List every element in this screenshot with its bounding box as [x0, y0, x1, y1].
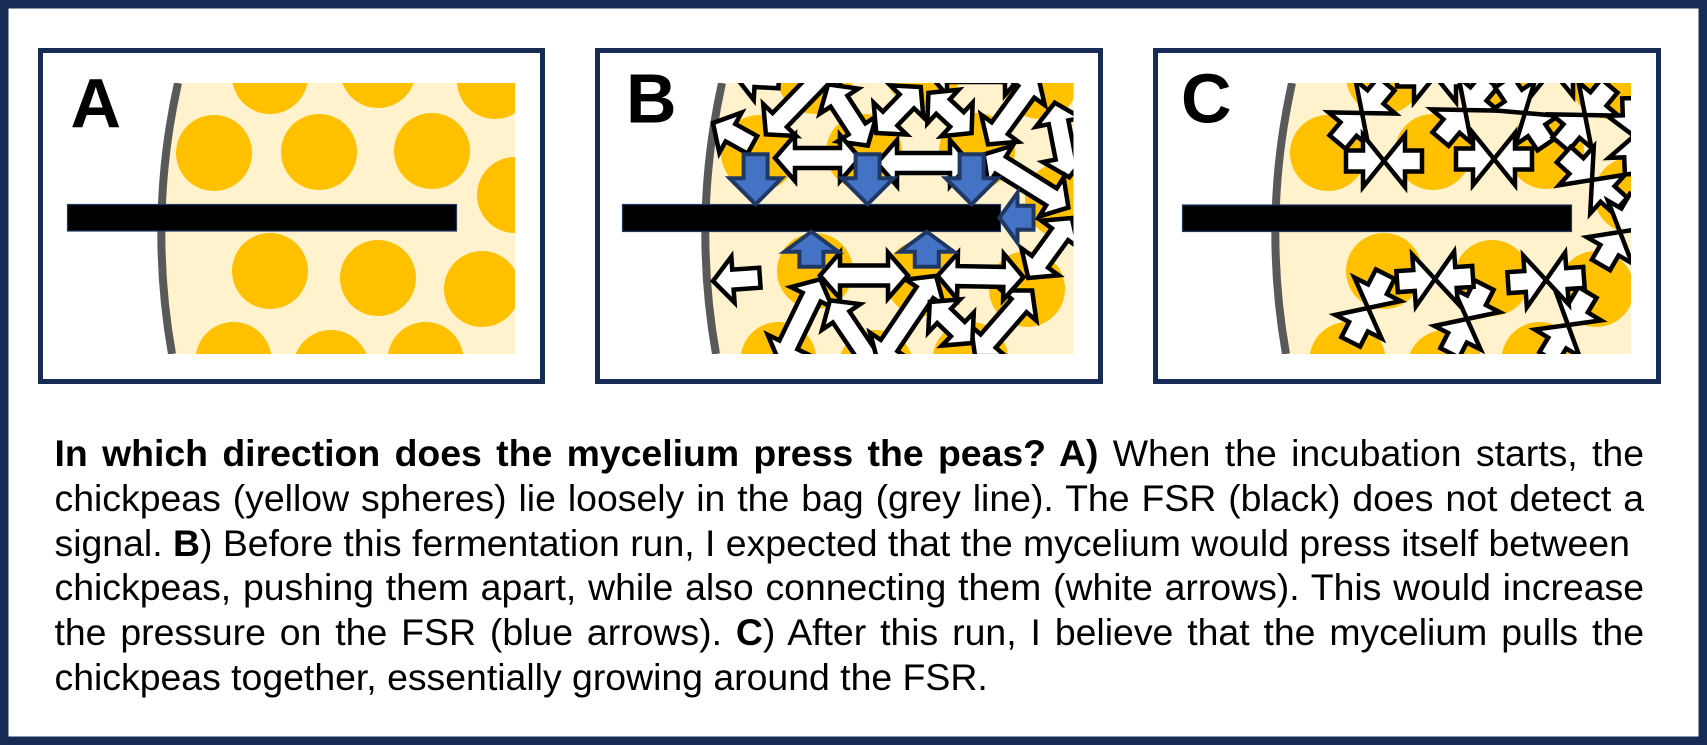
panel A label: A: [70, 64, 121, 142]
caption text block: [54, 432, 1644, 698]
caption text block: chickpeas (yellow spheres) lie loosely in the bag (grey line). The FSR (black) does not detect a: [54, 477, 1644, 519]
panel C label: C: [1181, 59, 1232, 137]
panel B FSR sensor bar: [622, 204, 1000, 232]
panel A FSR sensor bar: [68, 204, 456, 231]
panel A bag and chickpeas: [157, 83, 515, 354]
caption text block: the pressure on the FSR (blue arrows). C) After this run, I believe that the mycelium pulls the: [54, 611, 1644, 653]
panel B blue pressure arrows: [730, 154, 1034, 267]
panel B bag, chickpeas and white arrows: [701, 83, 1074, 354]
panel B: expected pushing apart: [598, 32, 1101, 406]
panel B label: B: [626, 59, 677, 137]
caption text block: chickpeas, pushing them apart, while also connecting them (white arrows). This would increase: [54, 566, 1644, 608]
panel C FSR sensor bar: [1182, 205, 1572, 232]
caption text block: In which direction does the mycelium press the peas? A) When the incubation starts, the: [54, 432, 1644, 474]
caption text block: chickpeas together, essentially growing around the FSR.: [54, 656, 988, 698]
panel C: mycelium pulling chickpeas together: [1153, 48, 1661, 384]
panel C bag, chickpeas and white arrows: [1271, 83, 1631, 354]
panel A: chickpeas lying loosely: [38, 48, 545, 384]
caption text block: signal. B) Before this fermentation run, I expected that the mycelium would press itself between: [54, 522, 1630, 564]
